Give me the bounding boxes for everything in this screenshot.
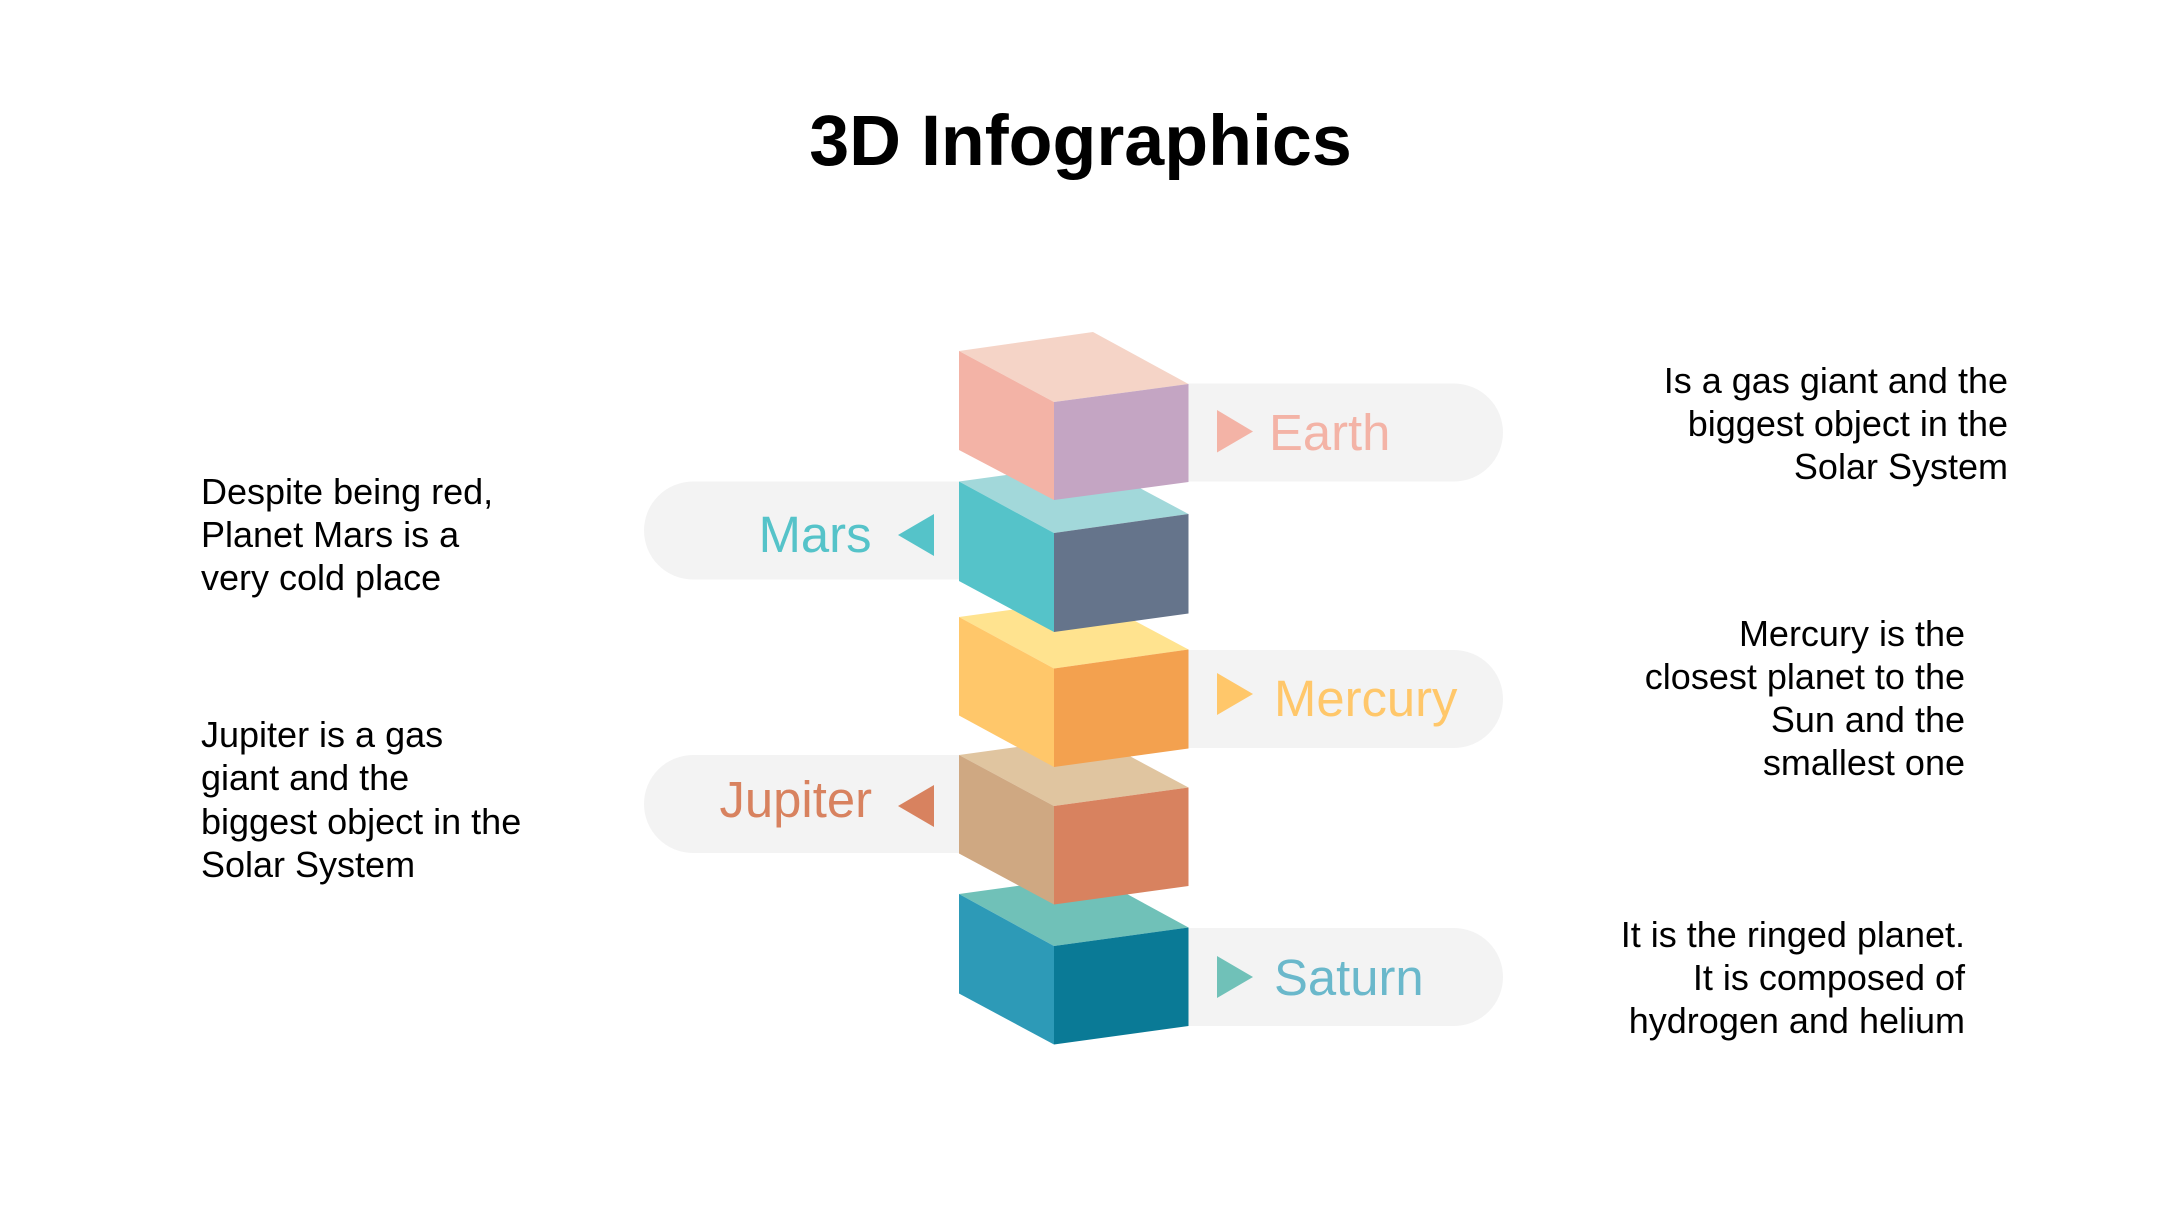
label pill: Jupiter [644, 755, 1000, 853]
text block: Saturn description: It is composed of [1693, 957, 1966, 998]
Mars label: Mars [759, 506, 872, 563]
icon: Saturn arrow [1217, 956, 1253, 998]
icon: Mercury arrow [1217, 673, 1253, 715]
text block: Jupiter description: Jupiter is a gas [201, 714, 443, 755]
text block: Earth description: Is a gas giant and the [1664, 360, 2008, 401]
text block: Earth description: biggest object in the [1688, 403, 2008, 444]
title: 3D Infographics [809, 101, 1352, 181]
text block: Jupiter description: giant and the [201, 757, 409, 798]
icon: Earth arrow [1217, 410, 1253, 452]
text block: Saturn description: hydrogen and helium [1629, 1000, 1965, 1041]
Jupiter label: Jupiter [720, 771, 872, 828]
text block: Mercury description: smallest one [1763, 742, 1965, 783]
cube: Mars [959, 463, 1188, 632]
cube: Mercury [959, 598, 1188, 767]
Saturn label: Saturn [1274, 949, 1424, 1006]
icon: Mars arrow [898, 514, 934, 556]
text block: Mars description: very cold place [201, 557, 441, 598]
text block: Saturn description [1621, 914, 1966, 1041]
label pill: Earth [1150, 384, 1503, 482]
label pill: Saturn [1150, 928, 1503, 1026]
text block: Mercury description: Mercury is the [1739, 613, 1965, 654]
cube: Earth [959, 332, 1188, 500]
text block: Mars description [201, 471, 493, 598]
Earth label: Earth [1269, 404, 1390, 461]
text block: Jupiter description: Solar System [201, 844, 415, 885]
text block: Mars description: Planet Mars is a [201, 514, 460, 555]
text block: Mercury description: Sun and the [1771, 699, 1965, 740]
text block: Jupiter description: biggest object in the [201, 801, 521, 842]
Mercury label: Mercury [1274, 670, 1458, 727]
label pill: Mercury [1150, 650, 1503, 748]
icon: Jupiter arrow [898, 785, 934, 827]
text block: Saturn description: It is the ringed planet. [1621, 914, 1965, 955]
text block: Earth description [1664, 360, 2008, 487]
text block: Jupiter description [201, 714, 521, 885]
cube: Saturn [959, 876, 1188, 1044]
text block: Mercury description [1645, 613, 1965, 783]
cube: Jupiter [959, 736, 1188, 904]
text block: Mercury description: closest planet to the [1645, 656, 1965, 697]
text block: Earth description: Solar System [1794, 446, 2008, 487]
text block: Mars description: Despite being red, [201, 471, 493, 512]
label pill: Mars [644, 482, 1000, 580]
